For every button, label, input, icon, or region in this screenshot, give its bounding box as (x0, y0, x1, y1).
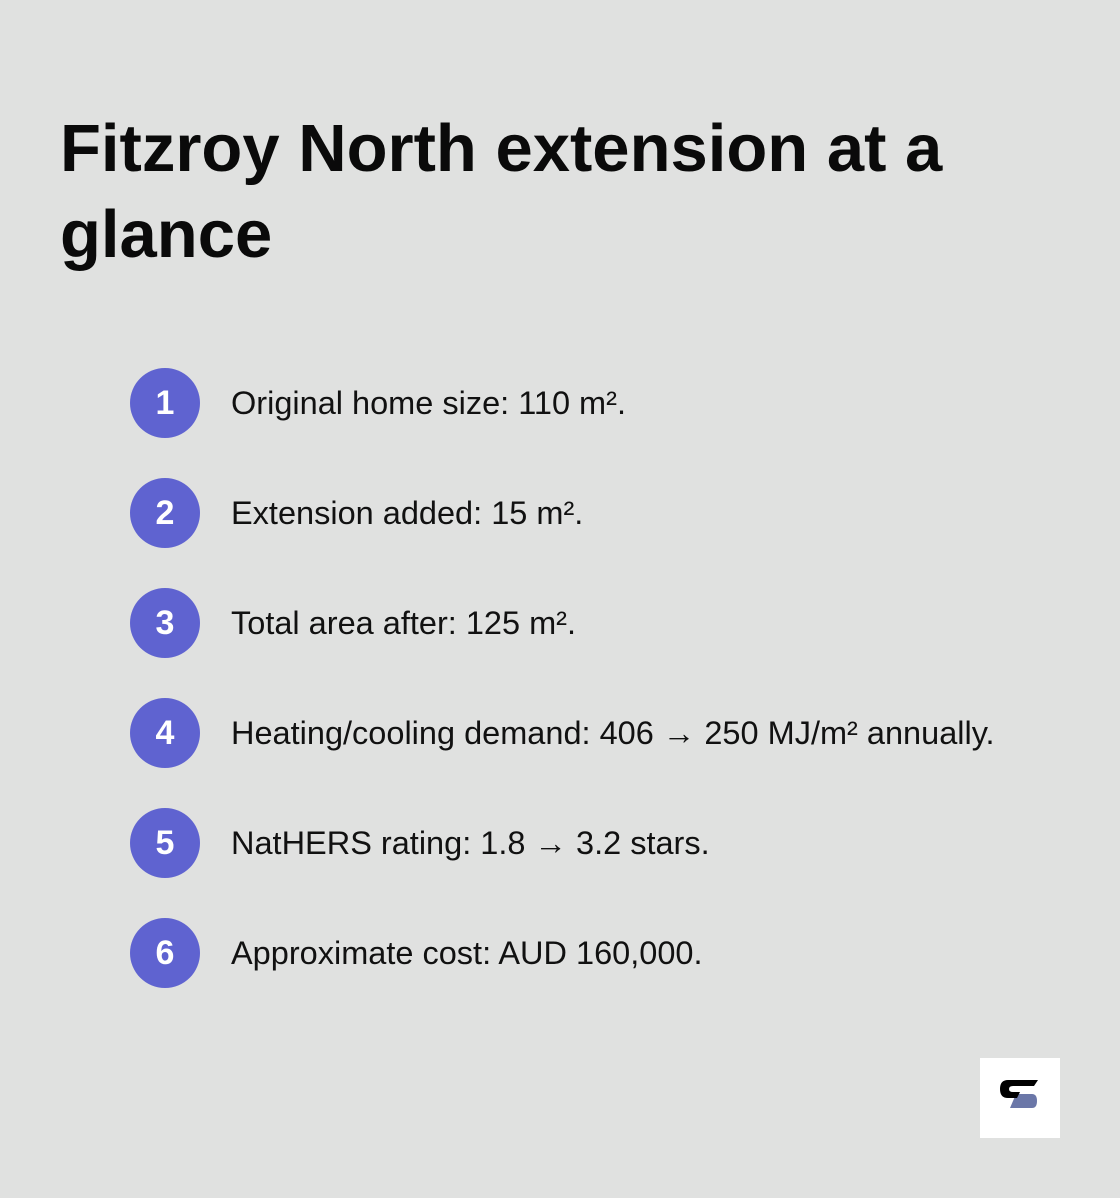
item 3: Total area after: 125 m². (231, 605, 576, 641)
item 2: 2 (156, 494, 174, 532)
item 3: 3 (156, 604, 174, 642)
title: Fitzroy North extension at a glance (60, 111, 942, 272)
item 5: 5 (156, 824, 174, 862)
item 5 (130, 808, 710, 878)
item 4: Heating/cooling demand: 406 → 250 MJ/m² annually. (231, 715, 995, 751)
item 2: Extension added: 15 m². (231, 495, 583, 531)
item 4 (130, 698, 995, 768)
item 6: Approximate cost: AUD 160,000. (231, 935, 703, 971)
item 3 (130, 588, 576, 658)
item 6 (130, 918, 703, 988)
item 4: 4 (156, 714, 174, 752)
item 2 (130, 478, 583, 548)
logo (980, 1058, 1060, 1138)
item 5: NatHERS rating: 1.8 → 3.2 stars. (231, 825, 710, 861)
item 1: Original home size: 110 m². (231, 385, 626, 421)
item 1: 1 (156, 384, 174, 422)
item 6: 6 (156, 934, 174, 972)
item 1 (130, 368, 626, 438)
